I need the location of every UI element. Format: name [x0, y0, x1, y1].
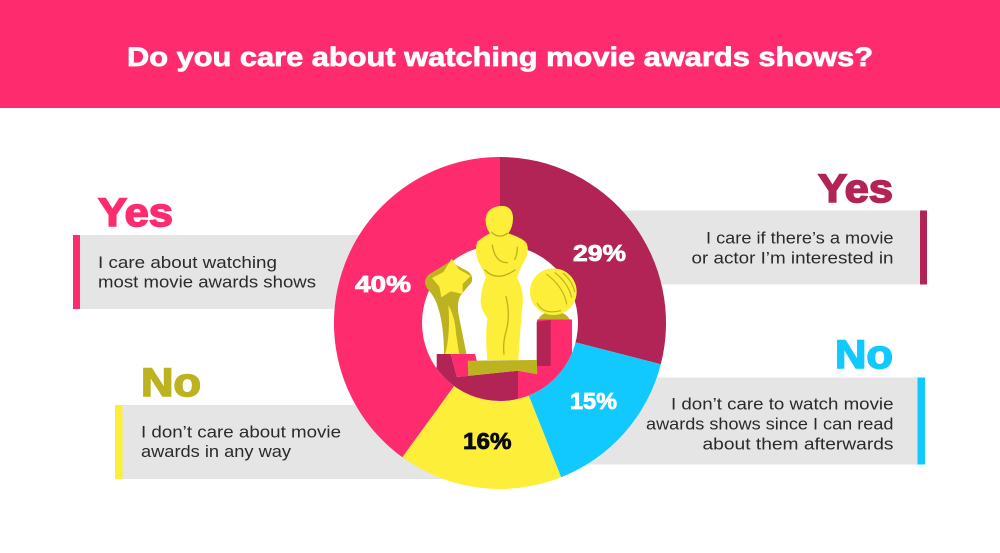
text: no 16% description: I don’t care about movie — [141, 422, 341, 442]
text: no 15% description: I don’t care to watch movie — [671, 394, 894, 414]
label: 40%: 40% — [355, 271, 411, 297]
label: 15%: 15% — [570, 388, 617, 414]
heading: yes: Yes — [818, 167, 893, 211]
text: yes 29% description — [692, 228, 894, 268]
text: yes 40% description: I care about watching — [98, 253, 277, 272]
donut chart — [334, 157, 666, 489]
panel: yes 29% — [600, 167, 927, 284]
text: yes 40% description: most movie awards shows — [98, 272, 316, 292]
slice: 29% — [500, 157, 666, 364]
panel: no 15% — [560, 333, 925, 464]
icon: trophies — [425, 206, 577, 405]
text: no 15% description: awards shows since I can read — [646, 414, 894, 434]
heading: no: No — [835, 333, 893, 377]
text: yes 29% description: or actor I’m interested in — [692, 248, 894, 268]
slice: 15% — [500, 323, 661, 477]
panel: no 16% — [115, 361, 450, 479]
icon: globe trophy — [530, 268, 577, 320]
panel: yes 40% — [73, 191, 363, 309]
slice: 16% — [402, 323, 561, 489]
text: no 15% description: about them afterwards — [702, 434, 894, 454]
text: no 15% description — [646, 394, 894, 454]
header banner — [0, 0, 1000, 108]
slice: 40% — [334, 157, 500, 457]
heading: no: No — [141, 361, 201, 405]
heading: yes: Yes — [98, 191, 173, 235]
icon: trophy bases — [430, 320, 572, 405]
icon: star trophy — [425, 259, 472, 355]
title: Do you care about watching movie awards shows? — [127, 42, 873, 72]
label: 29%: 29% — [573, 240, 626, 266]
icon: oscar statue — [476, 206, 528, 360]
text: yes 40% description — [98, 253, 316, 292]
text: yes 29% description: I care if there’s a movie — [706, 228, 894, 248]
label: 16%: 16% — [463, 428, 512, 454]
text: no 16% description — [141, 422, 341, 461]
text: no 16% description: awards in any way — [141, 442, 292, 461]
